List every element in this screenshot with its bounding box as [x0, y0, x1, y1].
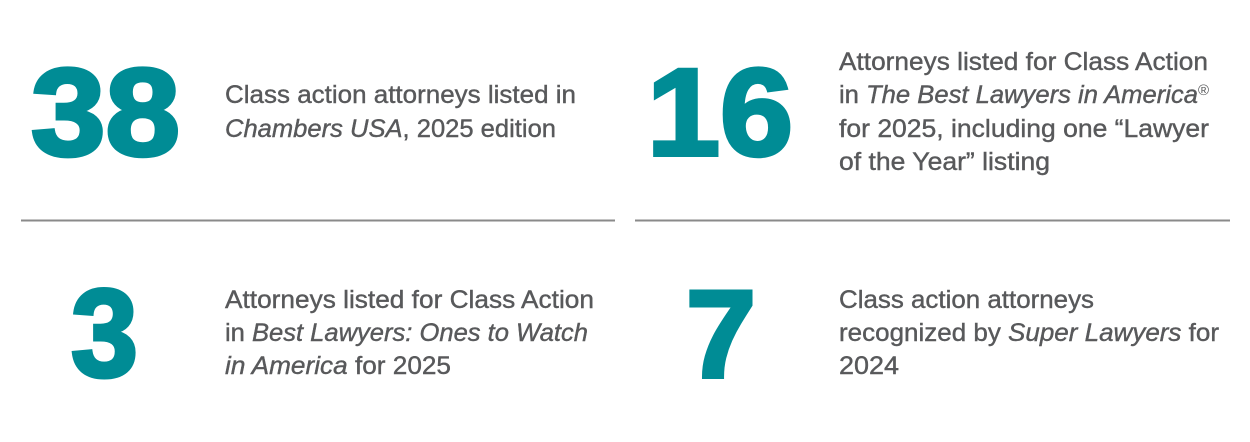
number: 7: 7: [686, 266, 756, 404]
text: The Best Lawyers description: Attorneys listed for Class Action: [839, 48, 1208, 76]
text: Ones to Watch description: in America for 2025: [225, 352, 451, 380]
text: Super Lawyers description: [839, 286, 1219, 380]
panel: Chambers USA stat: [31, 44, 576, 182]
text: Ones to Watch description: in Best Lawyers: Ones to Watch: [225, 319, 588, 347]
number: 3: 3: [71, 265, 138, 403]
panel: Ones to Watch stat: [71, 265, 594, 403]
text: Chambers USA description: Chambers USA, 2025 edition: [225, 115, 556, 143]
text: The Best Lawyers description: ®: [1198, 82, 1209, 99]
text: The Best Lawyers description: for 2025, including one “Lawyer: [839, 115, 1209, 143]
panel: Super Lawyers stat: [686, 266, 1219, 404]
text: The Best Lawyers description: in The Best Lawyers in America: [839, 81, 1198, 109]
text: Super Lawyers description: recognized by Super Lawyers for: [839, 319, 1219, 347]
text: Ones to Watch description: [225, 286, 594, 380]
text: Super Lawyers description: 2024: [839, 352, 899, 380]
number: 38: 38: [31, 44, 180, 182]
text: Ones to Watch description: Attorneys listed for Class Action: [225, 286, 594, 314]
text: The Best Lawyers description: [839, 48, 1209, 176]
divider: right: [635, 220, 1230, 222]
text: Chambers USA description: [225, 81, 576, 143]
text: Super Lawyers description: Class action attorneys: [839, 286, 1094, 314]
text: The Best Lawyers description: of the Year” listing: [839, 148, 1050, 176]
text: Chambers USA description: Class action attorneys listed in: [225, 81, 576, 109]
number: 16: 16: [647, 44, 793, 182]
panel: The Best Lawyers in America stat: [647, 44, 1209, 182]
divider: left: [21, 220, 615, 222]
